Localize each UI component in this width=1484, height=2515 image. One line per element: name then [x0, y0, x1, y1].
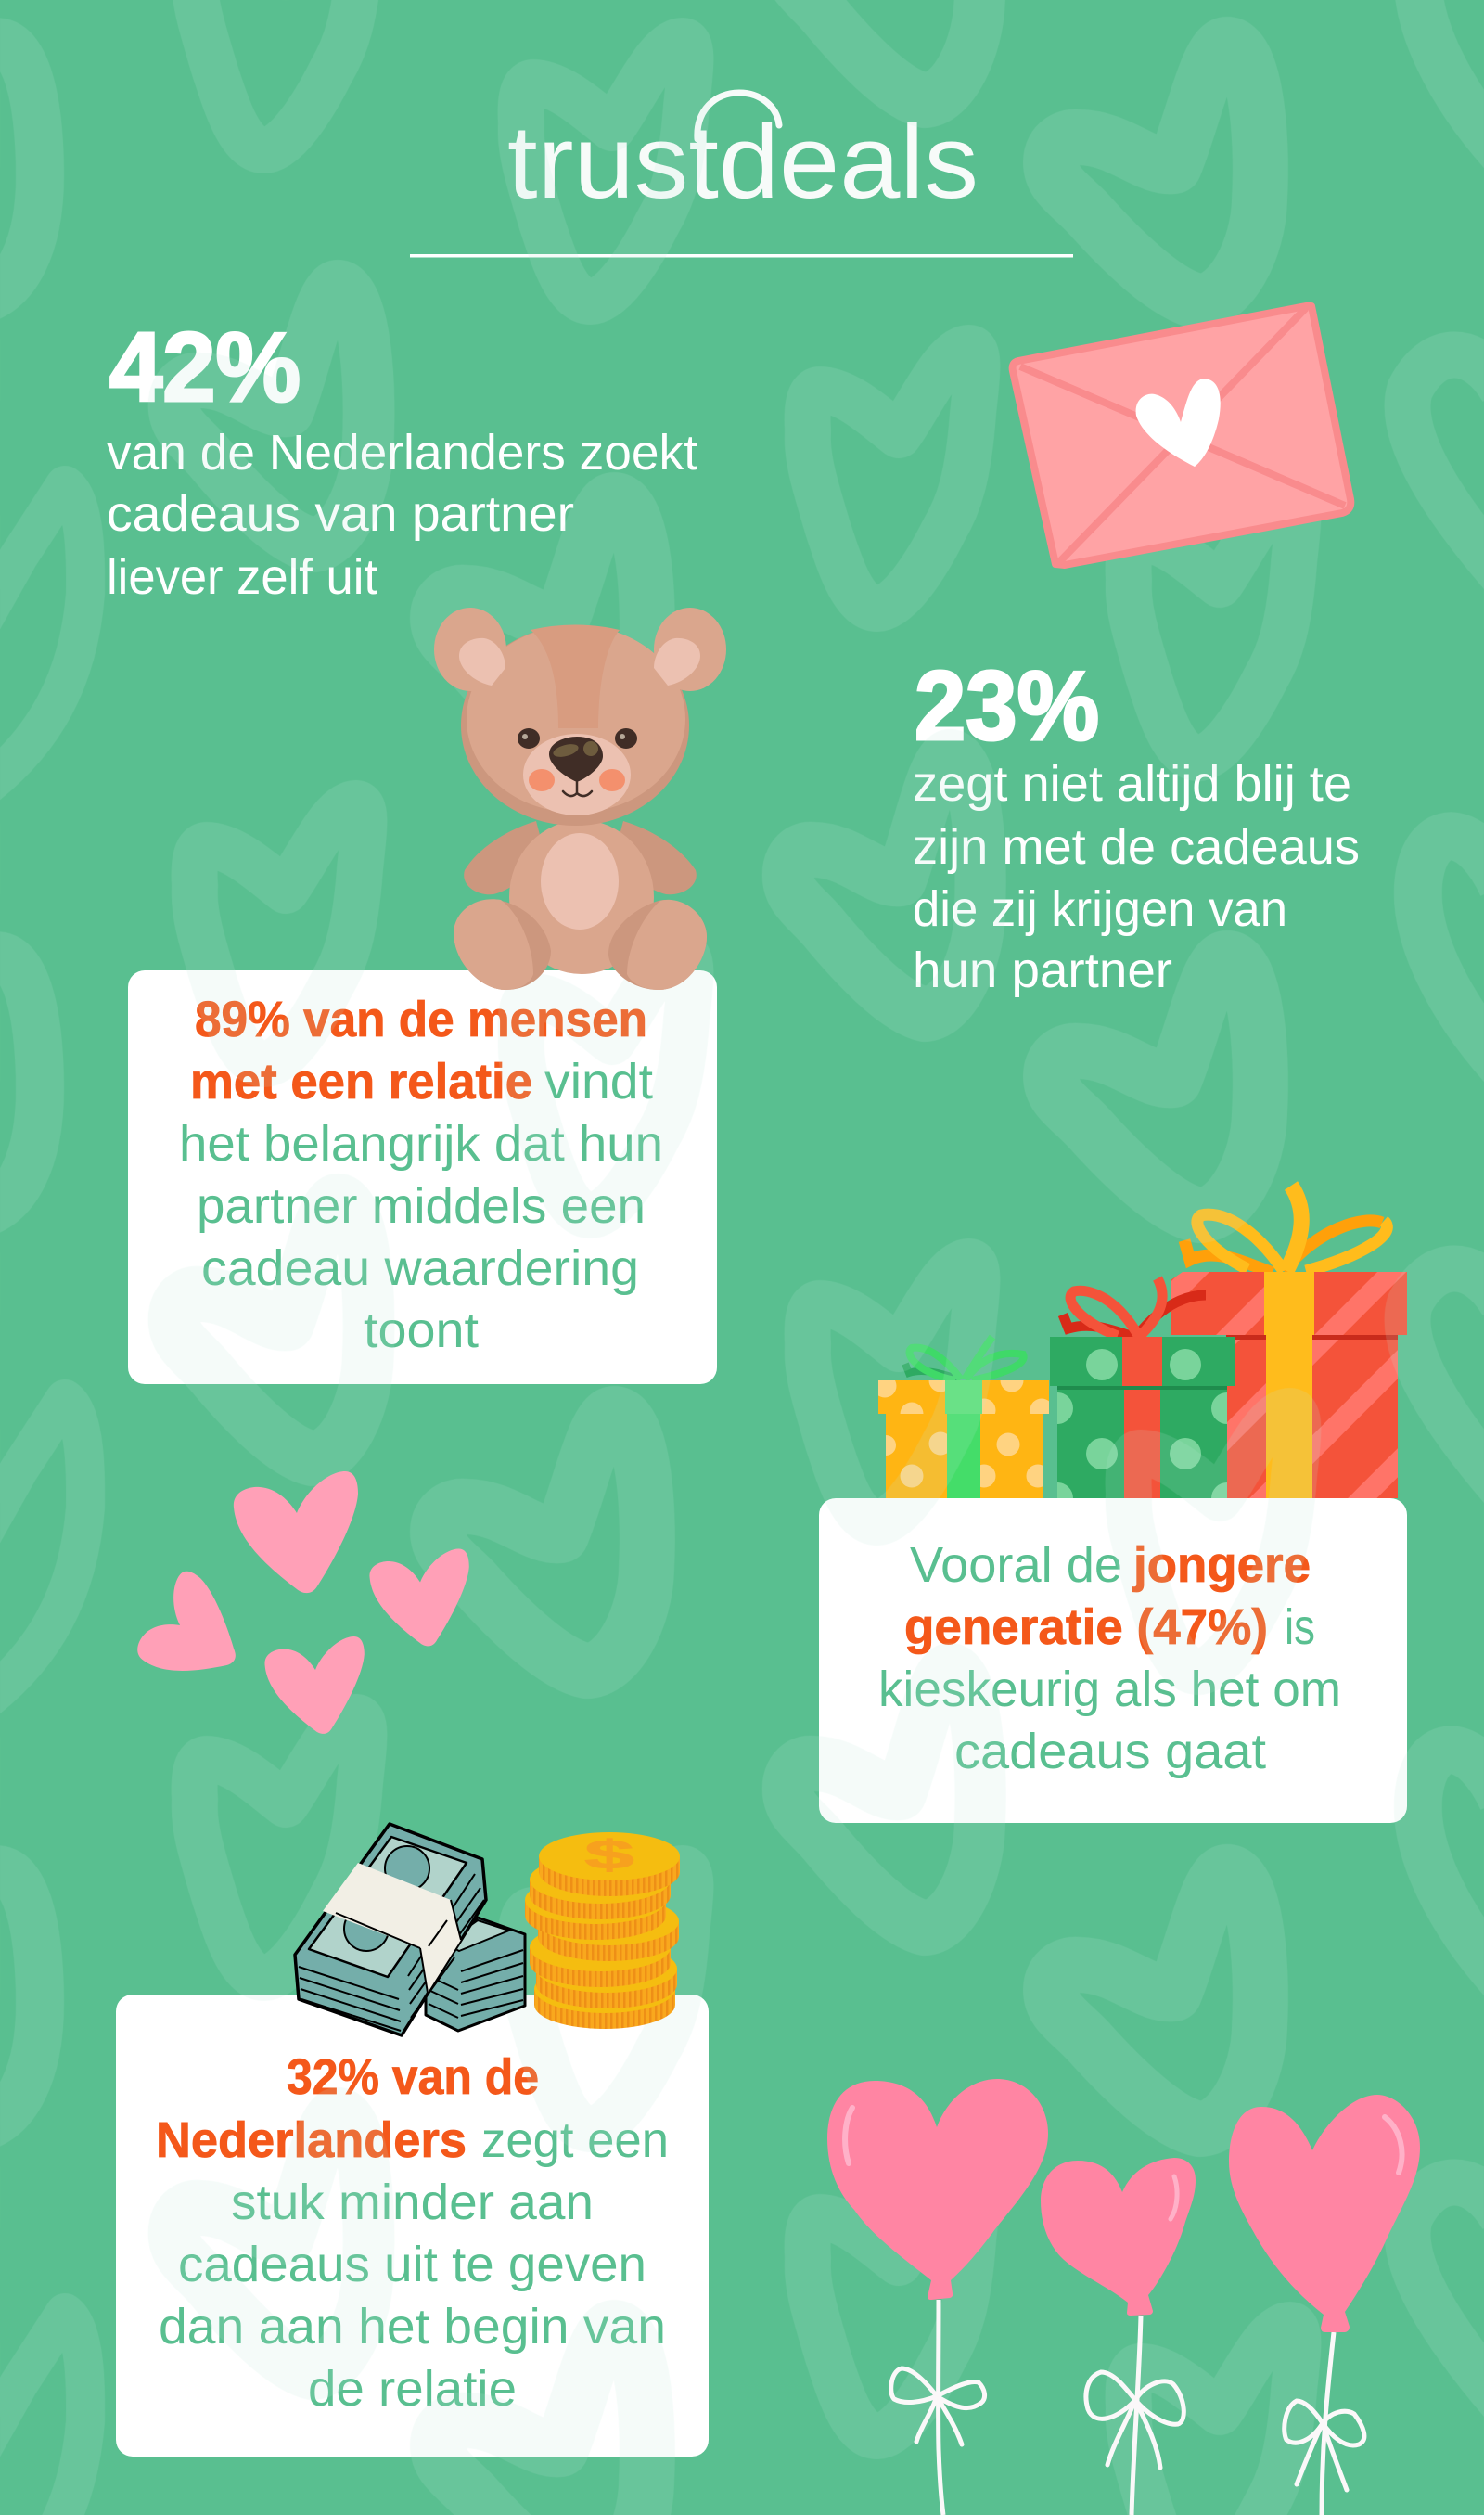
rear stack of bills — [426, 1918, 525, 2031]
card text — [179, 992, 663, 1358]
card text: zegt een — [481, 2112, 669, 2168]
card text — [156, 2049, 669, 2417]
statistic: 23 percent: zegt niet altijd blij te — [913, 756, 1351, 812]
card text: cadeau waardering — [201, 1240, 639, 1296]
statistic: 23 percent: hun partner — [913, 943, 1172, 998]
card text: partner middels een — [197, 1178, 646, 1234]
card text: Vooral de — [910, 1537, 1122, 1593]
card text: de relatie — [308, 2361, 517, 2417]
icon: heart balloon middle — [1041, 2158, 1196, 2515]
card text: stuk minder aan — [231, 2175, 594, 2230]
card text: kieskeurig als het om — [878, 1662, 1341, 1717]
front stack of bills — [295, 1824, 486, 2035]
icon: pink hearts cluster — [122, 1471, 469, 1734]
card text: cadeaus gaat — [954, 1724, 1266, 1779]
card text: met een relatie — [190, 1054, 532, 1110]
gift: yellow box — [874, 1337, 1054, 1498]
icon: gift boxes — [874, 1186, 1407, 1514]
gift: large red box — [1171, 1186, 1407, 1498]
statistic: 23 percent — [913, 651, 1360, 998]
card text: is — [1285, 1599, 1315, 1655]
statistic: 42 percent — [107, 313, 697, 605]
card text — [878, 1537, 1341, 1779]
icon: money stacks — [295, 1824, 525, 2035]
icon: heart balloon left — [827, 2079, 1048, 2515]
icon: heart balloon right — [1229, 2095, 1420, 2515]
logo: trustdeals: trustdeals — [507, 104, 979, 220]
statistic: 23 percent: die zij krijgen van — [913, 881, 1287, 937]
statistic: 42 percent: 42% — [109, 313, 301, 422]
statistic: 42 percent: cadeaus van partner — [107, 486, 574, 542]
card text: dan aan het begin van — [159, 2299, 666, 2355]
icon: teddy bear — [434, 608, 726, 990]
statistic: 23 percent: 23% — [915, 651, 1099, 761]
paper band — [323, 1863, 461, 1993]
card text: het belangrijk dat hun — [179, 1116, 663, 1172]
card text: Nederlanders — [156, 2112, 467, 2168]
icon: coin stack — [525, 1832, 680, 2029]
panel: 32 percent card — [116, 1995, 709, 2457]
card text: 32% van de — [287, 2049, 539, 2105]
statistic: 42 percent: liever zelf uit — [107, 549, 377, 605]
icon: coin stack: $ — [584, 1833, 634, 1878]
card text: vindt — [544, 1054, 653, 1110]
panel: 89 percent card — [128, 970, 717, 1384]
icon: pink envelope with heart — [1013, 306, 1350, 565]
card text: generatie (47%) — [904, 1599, 1268, 1655]
card text: jongere — [1132, 1537, 1311, 1593]
panel: jongere generatie card — [819, 1498, 1407, 1823]
card text: 89% van de mensen — [195, 992, 647, 1047]
card text: toont — [364, 1302, 479, 1358]
statistic: 42 percent: van de Nederlanders zoekt — [107, 425, 697, 481]
gift: green box — [1050, 1276, 1235, 1498]
statistic: 23 percent: zijn met de cadeaus — [913, 819, 1360, 875]
card text: cadeaus uit te geven — [178, 2237, 646, 2292]
